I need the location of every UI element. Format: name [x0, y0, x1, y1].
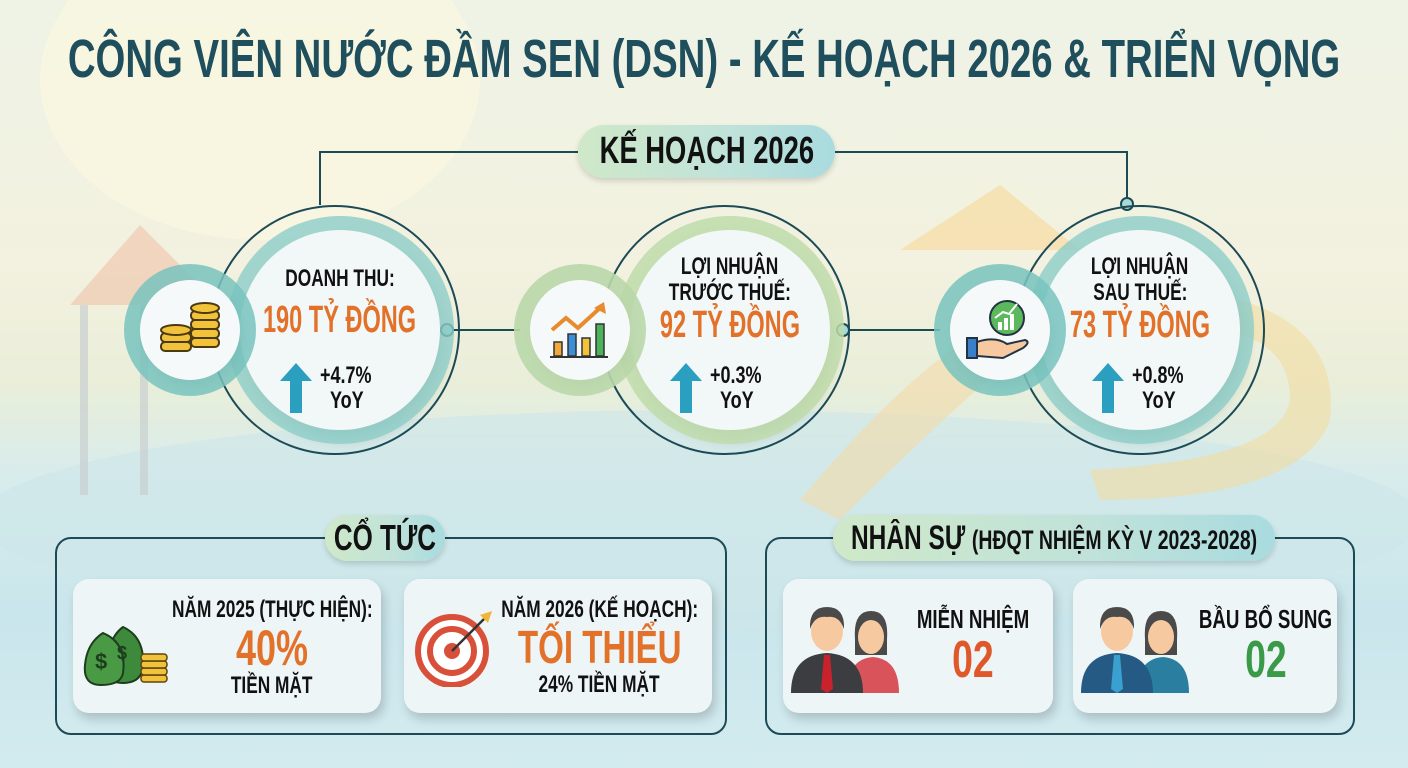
heading pill: KẾ HOẠCH 2026: KẾ HOẠCH 2026 — [599, 130, 814, 172]
panel: lợi nhuận sau thuế: SAU THUẾ: — [1093, 279, 1187, 306]
icon: money bags — [84, 626, 168, 686]
card: năm 2026 — [404, 579, 712, 713]
heading pill: nhân sự: NHÂN SỰ (HĐQT NHIỆM KỲ V 2023-2028) — [851, 518, 1257, 556]
icon: hand with growth — [950, 280, 1050, 380]
card: năm 2025: 40% — [236, 620, 308, 676]
arrow up: +0.8% — [1132, 362, 1184, 389]
icon: target — [415, 611, 492, 687]
arrow up: +0.3% — [710, 362, 762, 389]
panel: lợi nhuận sau thuế: LỢI NHUẬN — [1091, 253, 1189, 280]
heading pill: cổ tức: CỔ TỨC — [334, 517, 436, 558]
panel: nhân sự — [765, 537, 1355, 735]
card: bầu bổ sung — [1073, 579, 1337, 713]
card: năm 2025: TIỀN MẶT — [231, 672, 313, 699]
icon: coins — [140, 280, 240, 380]
title: CÔNG VIÊN NƯỚC ĐẦM SEN (DSN) - KẾ HOẠCH 2026 & TRIỂN VỌNG — [68, 29, 1340, 89]
icon: people red — [791, 607, 899, 693]
card: bầu bổ sung: 02 — [1245, 631, 1286, 689]
card: năm 2026: TỐI THIỂU — [518, 621, 681, 673]
icon: money bags: $ — [117, 643, 127, 663]
card: bầu bổ sung: BẦU BỔ SUNG — [1199, 604, 1332, 634]
arrow up: YoY — [1142, 387, 1176, 414]
panel: cổ tức — [55, 537, 727, 735]
card: năm 2025 — [73, 579, 381, 713]
arrow up: +4.7% — [320, 362, 372, 389]
panel: lợi nhuận sau thuế: 73 TỶ ĐỒNG — [1070, 304, 1210, 346]
panel: lợi nhuận trước thuế — [514, 205, 850, 455]
icon: money bags: $ — [95, 649, 107, 674]
heading pill: KẾ HOẠCH 2026 — [578, 125, 835, 178]
panel: lợi nhuận trước thuế: TRƯỚC THUẾ: — [669, 279, 791, 306]
panel: doanh thu — [124, 205, 460, 455]
panel: lợi nhuận trước thuế: LỢI NHUẬN — [681, 253, 779, 280]
icon: chart — [530, 280, 630, 380]
panel: lợi nhuận sau thuế — [934, 205, 1265, 455]
arrow up — [670, 362, 762, 414]
arrow up — [280, 362, 372, 414]
panel: doanh thu: 190 TỶ ĐỒNG — [263, 299, 417, 341]
card: năm 2026: 24% TIỀN MẶT — [539, 671, 660, 698]
panel: doanh thu: DOANH THU: — [285, 265, 395, 292]
arrow up: YoY — [720, 387, 754, 414]
card: năm 2026: NĂM 2026 (KẾ HOẠCH): — [501, 596, 698, 623]
card: miễn nhiệm: MIỄN NHIỆM — [917, 604, 1029, 634]
panel: lợi nhuận trước thuế: 92 TỶ ĐỒNG — [660, 304, 800, 346]
arrow up — [1092, 362, 1184, 414]
arrow up: YoY — [330, 387, 364, 414]
card: năm 2025: NĂM 2025 (THỰC HIỆN): — [172, 596, 372, 623]
card: miễn nhiệm: 02 — [952, 631, 994, 689]
icon: people blue — [1081, 607, 1189, 693]
card: miễn nhiệm — [783, 579, 1053, 713]
